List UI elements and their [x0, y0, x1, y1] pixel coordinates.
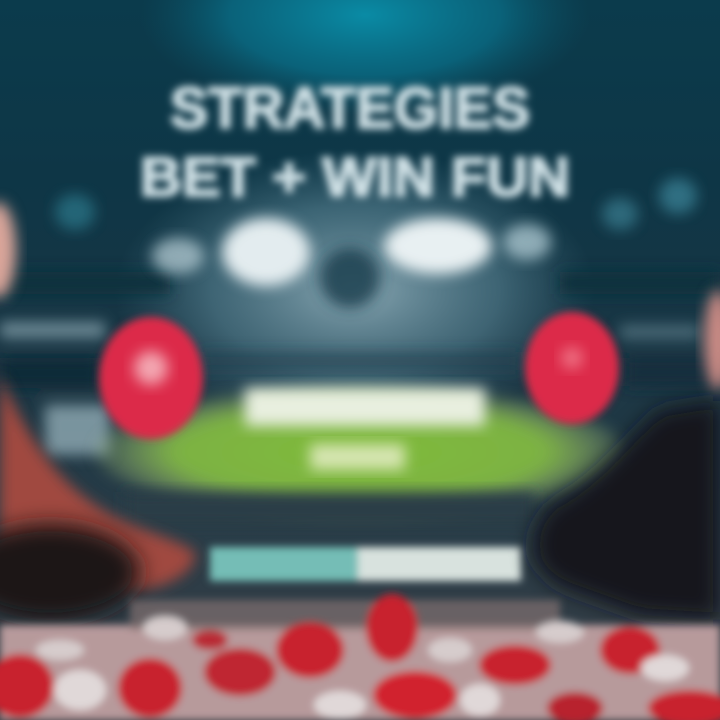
stadium stands stripes	[0, 272, 720, 455]
floating lights and third line	[55, 178, 697, 308]
title line two: BET + WIN FUN	[140, 145, 570, 208]
title text	[140, 76, 570, 208]
red and white chips	[0, 594, 720, 720]
icon: right red balloon	[525, 312, 619, 424]
title line one: STRATEGIES	[170, 76, 530, 141]
field headline	[245, 388, 485, 426]
green field	[95, 386, 625, 518]
left person arm	[0, 202, 195, 620]
right person arm	[533, 290, 720, 620]
bottom strip	[210, 547, 521, 581]
dark band below field	[125, 492, 535, 526]
icon: left red balloon	[99, 317, 203, 439]
field subline	[310, 444, 405, 470]
